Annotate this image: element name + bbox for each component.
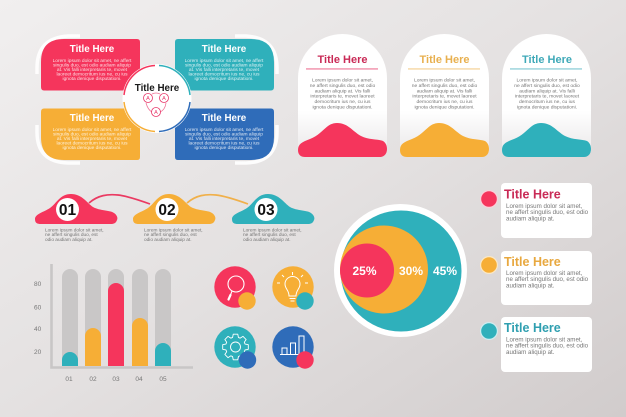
- legend item: orange: Lorem ipsum dolor sit amet,: [506, 270, 583, 277]
- step 02: odio audiam aliquip at.: [144, 237, 192, 243]
- center circle: [122, 64, 192, 133]
- icon: three connected people: A: [154, 110, 158, 116]
- legend item: red: Lorem ipsum dolor sit amet,: [506, 203, 583, 210]
- bar chart: [34, 264, 193, 383]
- decorative white arcs: [37, 36, 277, 163]
- panel: blue: Title Here: [202, 113, 247, 124]
- panel: red: Title Here: [70, 44, 115, 55]
- legend item: teal: ne affert singulis duo, est odio: [506, 343, 589, 350]
- panel: blue: [175, 108, 274, 160]
- legend item: orange: Title Here: [504, 255, 561, 269]
- icon: gear: [214, 326, 256, 369]
- text block: ne affert singulis duo, est odio: [514, 83, 580, 89]
- text block: Lorem ipsum dolor sit amet,: [517, 78, 577, 84]
- panel: orange: laoreet democritum ius ne, cu ius: [56, 140, 128, 146]
- panel: orange: Title Here: [70, 113, 115, 124]
- text block: Lorem ipsum dolor sit amet,: [312, 78, 373, 84]
- axes: [52, 264, 193, 368]
- legend item: orange: ne affert singulis duo, est odio: [506, 276, 589, 283]
- text block: interpretaris te, movet laoreet: [310, 94, 375, 100]
- text block: interpretaris te, movet laoreet: [412, 94, 477, 100]
- text block: audiam aliquip at. Vis falli: [519, 88, 575, 94]
- step 02: 02: [158, 202, 176, 219]
- panel: red: singulis duo, est odio audiam aliquip: [53, 62, 131, 68]
- panel: blue: ignota denique disputationi.: [195, 145, 253, 151]
- step 02: Lorem ipsum dolor sit amet,: [144, 228, 203, 234]
- text block: audiam aliquip at. Vis falli: [315, 88, 370, 94]
- axis labels: 05: [159, 376, 167, 383]
- panel: blue: laoreet democritum ius ne, cu ius: [188, 140, 260, 146]
- nested circles chart: 25%: [352, 264, 377, 278]
- step 01: 01: [59, 202, 76, 219]
- text block: Lorem ipsum dolor sit amet,: [414, 78, 475, 84]
- step 01: Lorem ipsum dolor sit amet,: [45, 228, 104, 234]
- step 01: [35, 194, 117, 243]
- connector: red: [89, 195, 150, 204]
- panel: arch card teal: [502, 34, 591, 157]
- axis labels: 01: [65, 376, 73, 383]
- text block: audiam aliquip at. Vis falli: [417, 88, 472, 94]
- legend item: teal: Lorem ipsum dolor sit amet,: [506, 336, 583, 344]
- text block: ne affert singulis duo, est odio: [412, 83, 478, 89]
- bars: [62, 352, 78, 366]
- panel: orange: [41, 108, 140, 160]
- axis labels: 03: [112, 376, 120, 383]
- step 03: 03: [257, 202, 275, 219]
- icon: three connected people: A: [146, 96, 150, 102]
- axis labels: 04: [135, 376, 143, 383]
- step 02: [133, 194, 215, 243]
- heading: Title Here: [420, 54, 469, 66]
- panel: orange: singulis duo, est odio audiam aliquip: [53, 132, 131, 138]
- axis labels: [34, 281, 167, 383]
- legend item: red: Title Here: [504, 188, 561, 202]
- legend item: teal: [480, 317, 592, 372]
- panel: red: ignota denique disputationi.: [63, 76, 121, 82]
- panel: teal: laoreet democritum ius ne, cu ius: [188, 71, 260, 77]
- panel: teal: Title Here: [202, 44, 247, 55]
- text block: democritum ius ne, cu ius: [417, 99, 473, 105]
- text block: ignota denique disputationi.: [414, 104, 475, 110]
- step 01: odio audiam aliquip at.: [45, 237, 93, 243]
- icon: magnifier: [214, 266, 256, 310]
- heading: Title Here: [522, 54, 572, 66]
- panel: teal: ignota denique disputationi.: [195, 76, 253, 82]
- icon: three connected people: [144, 93, 168, 116]
- text block: democritum ius ne, cu ius: [315, 99, 371, 105]
- timeline: [35, 194, 314, 243]
- panel: four-part title diagram: [37, 36, 277, 163]
- heading: Title Here: [318, 54, 367, 66]
- panel: teal: singulis duo, est odio audiam aliquip: [185, 62, 263, 68]
- text block: ignota denique disputationi.: [517, 104, 577, 110]
- panel: red: Lorem ipsum dolor sit amet, ne affert: [53, 58, 132, 64]
- nested circles chart: [334, 204, 467, 337]
- step 03: ne affert singulis duo, est: [243, 232, 296, 238]
- nested circles chart: 45%: [433, 264, 457, 278]
- panel: teal: [175, 39, 274, 90]
- panel: orange: ignota denique disputationi.: [63, 145, 121, 151]
- legend item: red: [480, 183, 592, 238]
- panel: red: laoreet democritum ius ne, cu ius: [56, 71, 128, 77]
- panel: orange: Lorem ipsum dolor sit amet, ne affert: [53, 127, 132, 133]
- icon: bar graph: [272, 326, 314, 369]
- step 03: odio audiam aliquip at.: [243, 237, 291, 243]
- panel: red: at. Vis falli interpretaris te, movet: [57, 67, 128, 73]
- panel: teal: at. Vis falli interpretaris te, movet: [189, 67, 260, 73]
- icon: three connected people: A: [162, 96, 166, 102]
- panel: red: [41, 39, 140, 90]
- panel: blue: Lorem ipsum dolor sit amet, ne affert: [185, 127, 264, 133]
- step 03: Lorem ipsum dolor sit amet,: [243, 228, 302, 234]
- wave shape: [502, 123, 591, 157]
- bar tracks: [62, 269, 171, 366]
- text block: ne affert singulis duo, est odio: [310, 83, 376, 89]
- panel: arch card red: [298, 34, 387, 157]
- text block: interpretaris te, movet laoreet: [515, 94, 580, 100]
- panel: blue: singulis duo, est odio audiam aliquip: [185, 132, 263, 138]
- step 03: [232, 194, 314, 243]
- wave shape: [298, 123, 387, 157]
- axis labels: 40: [34, 326, 42, 333]
- axis labels: 02: [89, 376, 97, 383]
- icon: light bulb: [272, 266, 314, 310]
- center circle: Title Here: [135, 83, 180, 94]
- legend item: orange: [480, 251, 592, 305]
- panel: teal: Lorem ipsum dolor sit amet, ne affert: [185, 58, 264, 64]
- legend item: red: audiam aliquip at.: [506, 215, 555, 222]
- legend item: orange: audiam aliquip at.: [506, 282, 555, 289]
- legend item: red: ne affert singulis duo, est odio: [506, 209, 589, 216]
- panel: arch card orange: [400, 34, 489, 157]
- text block: democritum ius ne, cu ius: [519, 99, 576, 105]
- axis labels: 80: [34, 281, 42, 288]
- panel: blue: at. Vis falli interpretaris te, movet: [189, 136, 260, 142]
- text block: ignota denique disputationi.: [312, 104, 373, 110]
- axis labels: 20: [34, 349, 42, 356]
- axis labels: 60: [34, 304, 42, 312]
- legend item: teal: audiam aliquip at.: [506, 349, 555, 356]
- legend item: teal: Title Here: [504, 321, 561, 335]
- step 02: ne affert singulis duo, est: [144, 232, 197, 238]
- nested circles chart: 30%: [399, 264, 423, 278]
- connector: orange: [187, 195, 248, 204]
- step 01: ne affert singulis duo, est: [45, 232, 98, 238]
- wave shape: [400, 123, 489, 157]
- panel: orange: at. Vis falli interpretaris te, movet: [57, 136, 128, 142]
